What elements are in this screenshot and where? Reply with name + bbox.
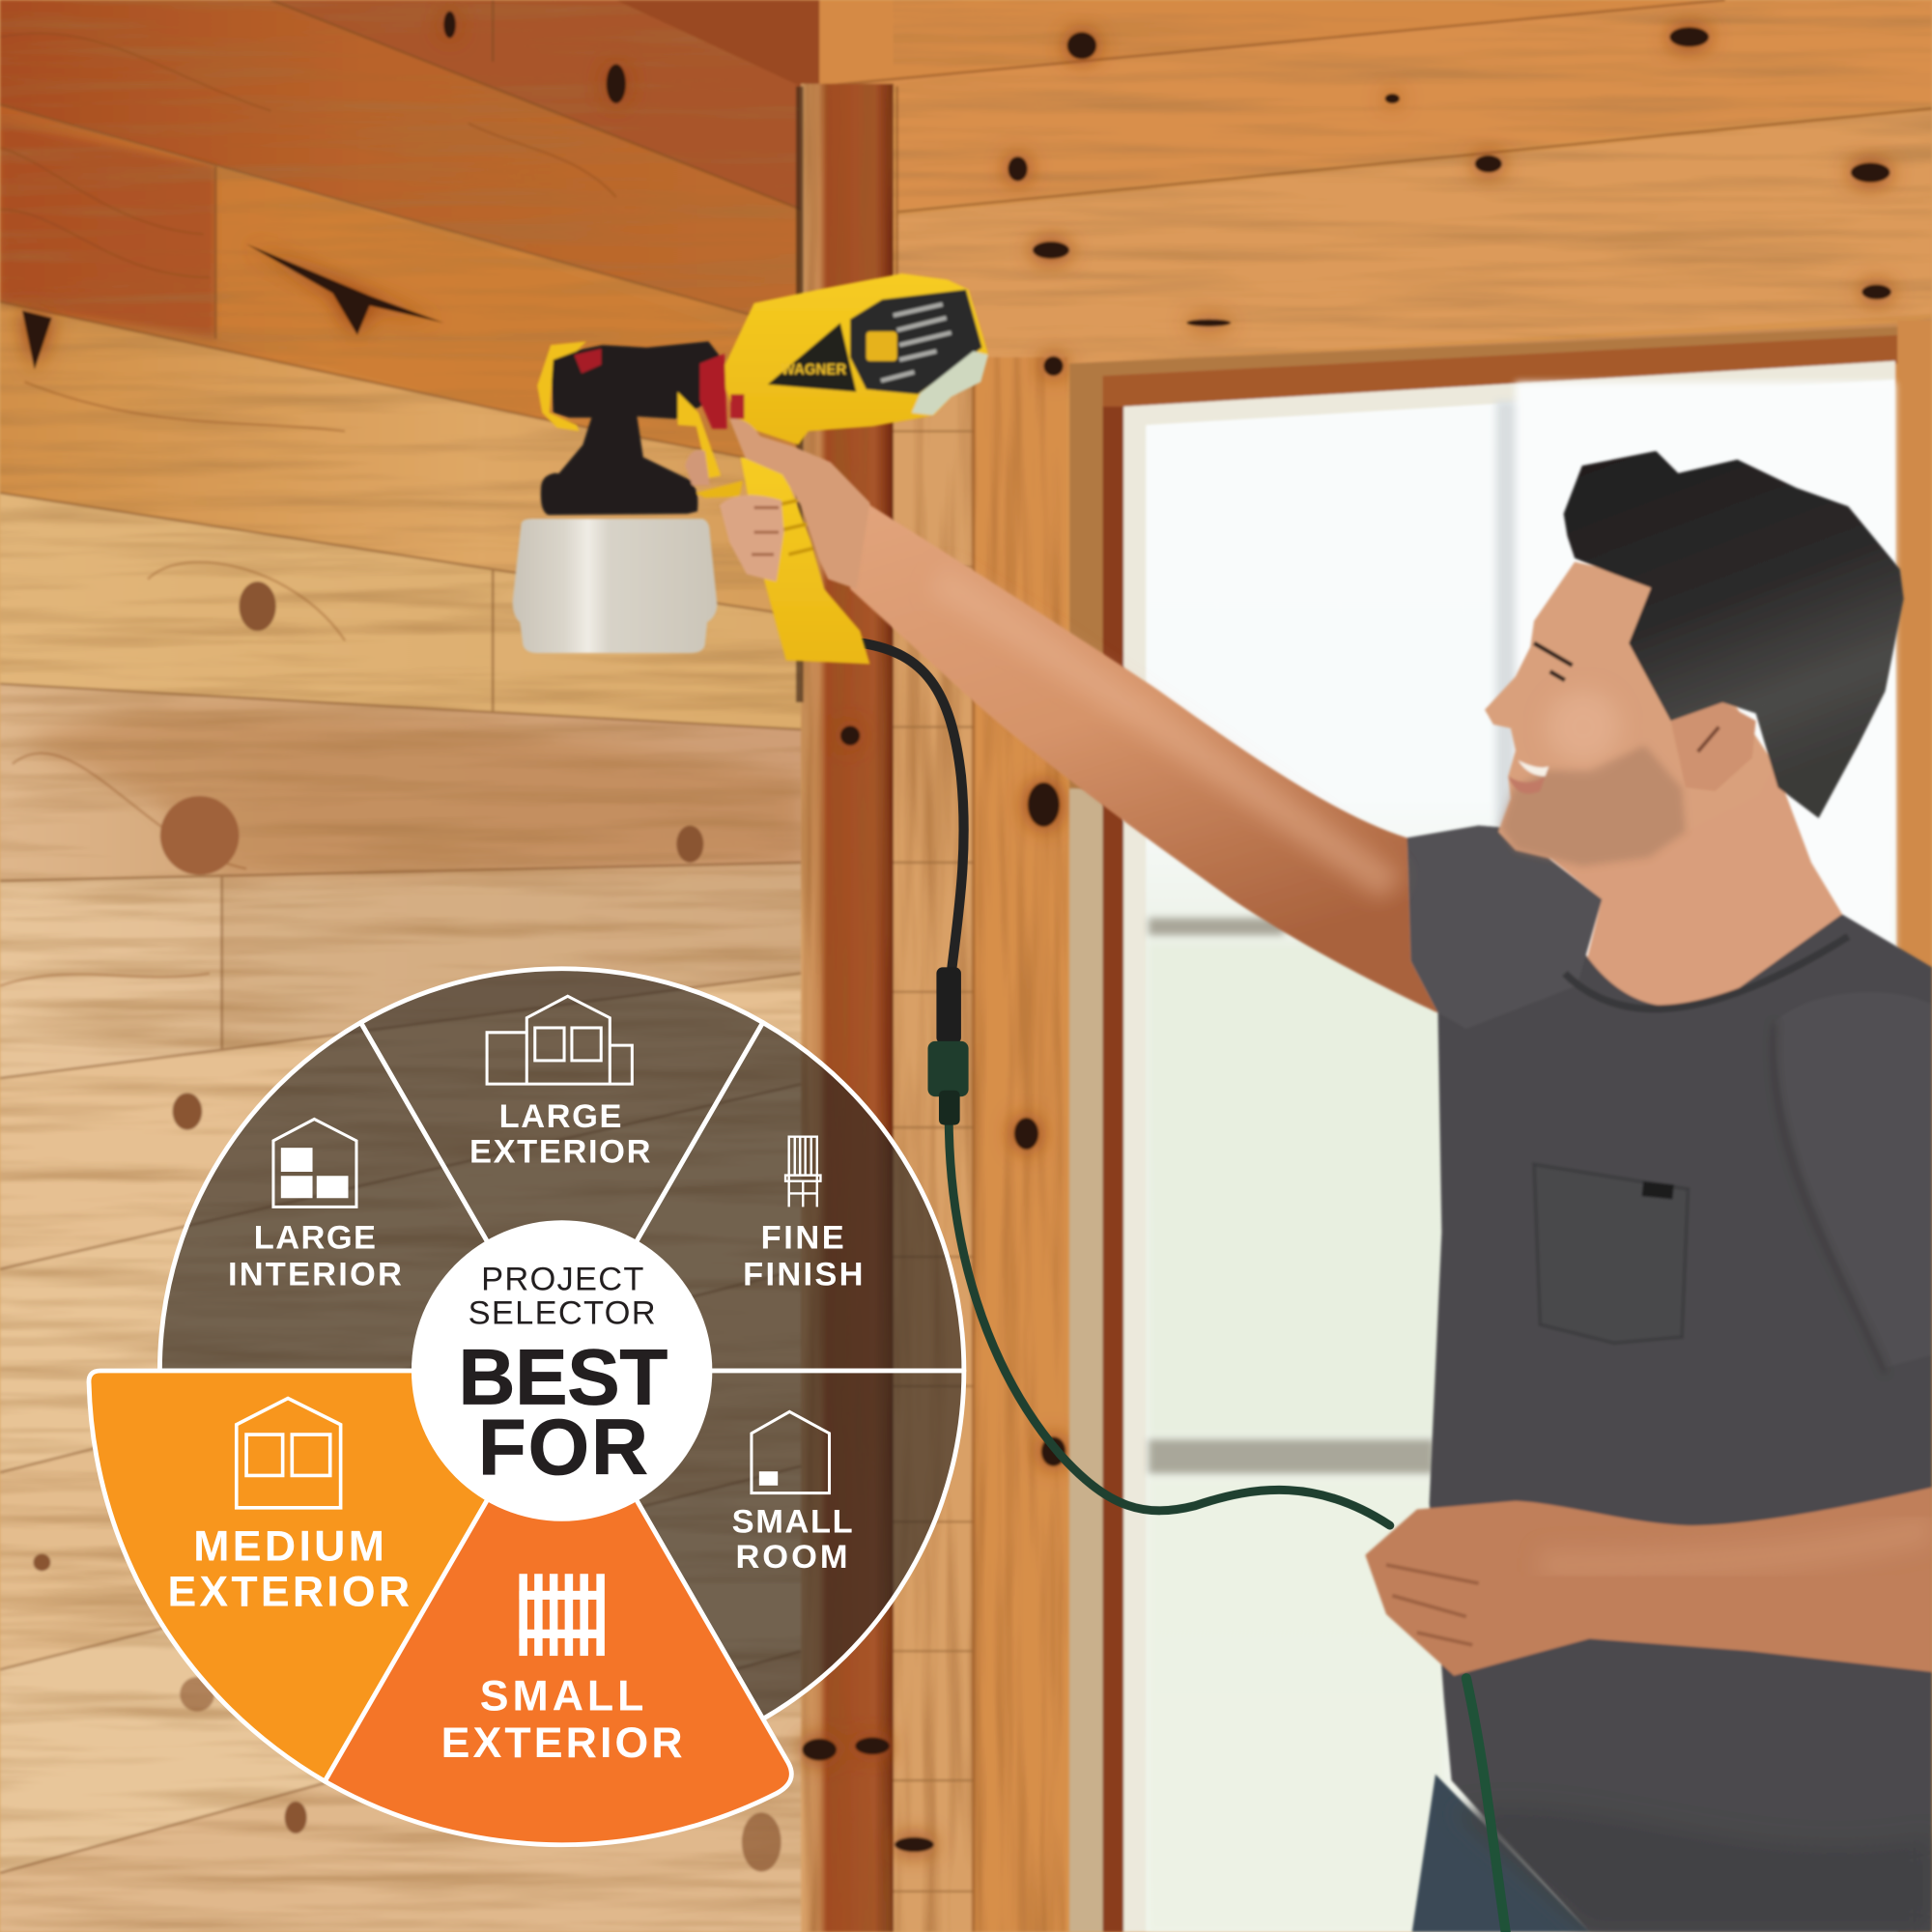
red collar: [699, 354, 727, 429]
paint sprayer: [513, 273, 988, 665]
neck: [1540, 764, 1848, 1035]
sprayer body: [724, 273, 988, 444]
black nozzle housing: [551, 341, 721, 483]
label: small room: SMALL: [732, 1504, 853, 1541]
icon: large exterior house: [487, 996, 632, 1084]
plug: [927, 967, 969, 1125]
icon: fence: [519, 1574, 605, 1656]
project selector: SELECTOR: [469, 1295, 656, 1332]
plank seams: [0, 0, 801, 1873]
center disc: [412, 1220, 712, 1521]
t-shirt: [1407, 826, 1932, 1932]
icon: medium house: [237, 1398, 341, 1508]
best for: BEST: [458, 1333, 668, 1421]
project selector wheel: [89, 969, 964, 1845]
window mullions: [1149, 382, 1895, 1932]
shirt pocket: [1534, 1164, 1688, 1343]
window trim right: [1897, 321, 1932, 1010]
label: small exterior: SMALL: [480, 1672, 643, 1719]
wagner panel: [768, 323, 856, 392]
brand: WAGNER: [781, 362, 846, 379]
yellow dial: [867, 331, 897, 361]
segment: large interior: [159, 1023, 562, 1371]
black cord: [863, 643, 964, 974]
segment: small exterior: [325, 1371, 791, 1845]
vent panel: [850, 290, 982, 394]
stubble: [1501, 746, 1686, 867]
pocket label: [1642, 1181, 1674, 1199]
clear cover: [912, 352, 988, 415]
jar: [513, 519, 717, 653]
wood post: [801, 84, 894, 1932]
icon: large interior house: [273, 1119, 356, 1207]
window frame: [1069, 318, 1932, 1932]
smile: [1518, 760, 1548, 777]
brow and eye: [1534, 643, 1573, 680]
right wall base: [801, 0, 1932, 1932]
boards beside post: [894, 357, 974, 1932]
jar lid: [541, 473, 697, 515]
power cord: [863, 643, 1506, 1932]
label: fine finish: FINISH: [743, 1256, 863, 1293]
labels: [167, 1098, 863, 1767]
trigger: [678, 392, 721, 478]
grain contours: [0, 33, 616, 985]
project selector: PROJECT: [481, 1261, 643, 1297]
label: large exterior: LARGE: [499, 1098, 621, 1135]
red latch: [574, 349, 601, 373]
wall edge shadow: [796, 86, 804, 702]
segment: fine finish: [562, 1023, 964, 1371]
icon: small room house: [752, 1411, 830, 1493]
left wall planks: [0, 0, 801, 1932]
label: medium exterior: MEDIUM: [193, 1522, 384, 1570]
sprayer handle: [741, 457, 870, 665]
wheel shapes: [89, 969, 964, 1845]
jeans: [1412, 1775, 1589, 1932]
green cord: [949, 1115, 1390, 1525]
face: [1485, 562, 1775, 867]
segment: large exterior: [361, 969, 763, 1371]
label: fine finish: FINE: [761, 1220, 844, 1257]
beam corner: [616, 0, 819, 86]
hand fingers: [720, 496, 783, 582]
segment: medium exterior: [89, 1371, 562, 1781]
nose shine: [1547, 690, 1620, 764]
label: small room: ROOM: [735, 1539, 848, 1576]
label: small exterior: EXTERIOR: [441, 1719, 683, 1767]
label: medium exterior: EXTERIOR: [167, 1569, 410, 1616]
segment: small room: [562, 1371, 964, 1719]
label: large interior: INTERIOR: [228, 1256, 402, 1293]
label: large exterior: EXTERIOR: [469, 1133, 651, 1170]
man: [850, 451, 1932, 1932]
green cord lower: [1466, 1678, 1506, 1932]
lower forearm: [1365, 1488, 1932, 1676]
upper arm at right: [1879, 1328, 1932, 1454]
red switch: [730, 394, 744, 419]
icon: chair: [785, 1137, 820, 1207]
label: large interior: LARGE: [254, 1220, 376, 1257]
best for: FOR: [478, 1404, 648, 1492]
center heading: [458, 1261, 668, 1492]
raised arm: [850, 502, 1438, 1012]
ear: [1671, 702, 1756, 791]
window glass: [1123, 361, 1897, 1932]
hair: [1564, 451, 1904, 818]
right wall boards: [819, 0, 1932, 86]
yellow front ring: [537, 341, 586, 431]
